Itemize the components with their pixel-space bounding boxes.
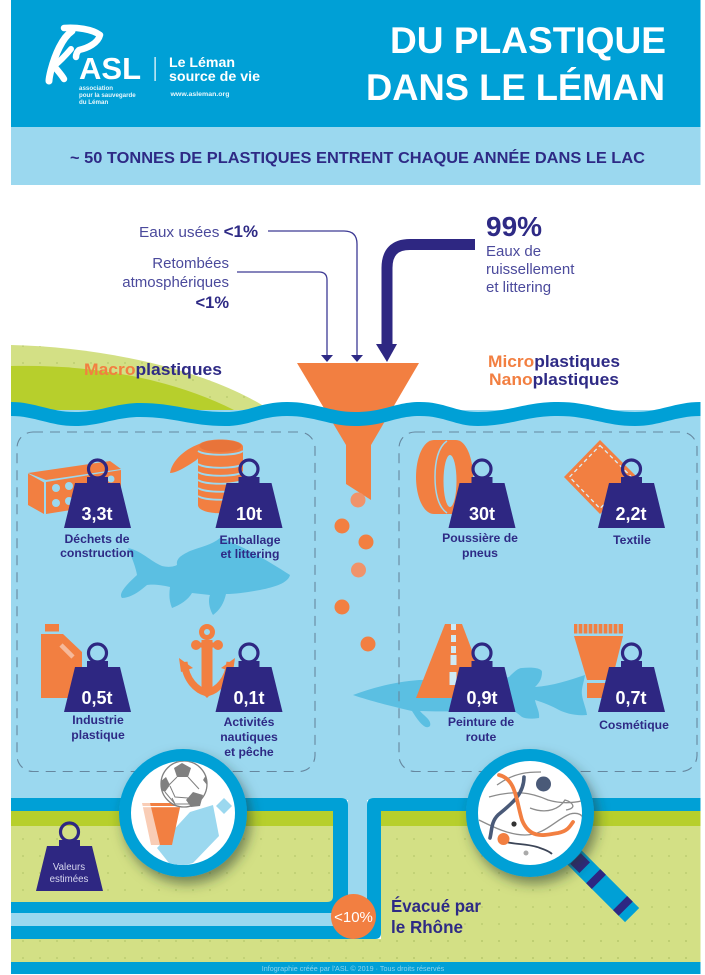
title: DU PLASTIQUE: [390, 20, 666, 61]
logo subtitle: du Léman: [79, 99, 108, 106]
label: Cosmétique: [599, 718, 669, 732]
icon: tube: [574, 624, 623, 698]
ground: left bank: [11, 798, 348, 939]
icon: can: [170, 440, 243, 513]
item: textile: [564, 440, 665, 547]
icon: bottle cap: [216, 798, 232, 814]
lake water: [11, 410, 700, 800]
icon: road: [416, 624, 490, 698]
hill: [11, 345, 262, 425]
source: eaux de ruissellement: et littering: [486, 279, 551, 296]
weight: 0,1t: 0,1t: [233, 688, 265, 708]
label: construction: [60, 546, 134, 560]
outflow badge: [331, 894, 376, 939]
weight legend: valeurs estimées: [36, 823, 103, 891]
weight: 30t: 30t: [469, 504, 495, 524]
wave surface: [11, 402, 700, 426]
subtitle band: [11, 127, 700, 185]
label: Textile: [613, 533, 651, 547]
dark fibres: [490, 777, 524, 838]
item: peinture de route: [416, 624, 516, 744]
heading: micro et nanoplastiques: Microplastiques: [488, 353, 616, 371]
fish: left: [121, 538, 290, 615]
icon: anchor: [179, 626, 235, 698]
fish: pike: [353, 668, 587, 727]
item: cosmétique: [574, 624, 669, 732]
panel: microplastiques frame: [399, 432, 697, 772]
label: nautiques: [220, 730, 278, 744]
item: activités nautiques et pêche: [179, 626, 282, 759]
funnel: [297, 363, 419, 500]
icon: fabric: [564, 440, 637, 514]
label: route: [466, 730, 496, 744]
logo ASL: [49, 28, 260, 106]
source: retombées atmosphériques: [122, 255, 333, 362]
label: Peinture de: [448, 715, 514, 729]
label: évacué par le Rhône: le Rhône: [391, 917, 463, 937]
logo slogan: source de vie: [169, 68, 260, 84]
logo website: www.asleman.org: [169, 91, 230, 98]
footer credit: Infographie créée par l'ASL © 2019 · Tous droits réservés: [262, 964, 445, 973]
footer bar: [11, 962, 700, 974]
weight: 2,2t: 2,2t: [615, 504, 647, 524]
plastic droplets: [334, 492, 376, 652]
label: pneus: [462, 546, 498, 560]
source: eaux usées: Eaux usées <1%: [139, 223, 258, 241]
item: poussière de pneus: [416, 440, 518, 560]
outflow badge: <10%: [334, 909, 373, 926]
weight: 3,3t: 3,3t: [81, 504, 113, 524]
item: industrie plastique: [41, 624, 131, 742]
icon: jug: [41, 624, 82, 698]
dolphin mark: [49, 28, 100, 81]
source: eaux de ruissellement: 99%: [486, 211, 542, 242]
magnifier: microplastics: [466, 749, 639, 922]
magnifier handle: [565, 848, 639, 922]
icon: brick: [28, 461, 121, 514]
weight: 0,9t: 0,9t: [466, 688, 498, 708]
weight legend: valeurs estimées: estimées: [50, 874, 89, 885]
title: DANS LE LÉMAN: [366, 67, 665, 108]
source: retombées atmosphériques: Retombées: [152, 255, 229, 272]
label: Poussière de: [442, 531, 518, 545]
icon: cup: [150, 803, 181, 845]
label: Activités: [224, 715, 275, 729]
header banner: [11, 0, 700, 127]
particles: [536, 776, 551, 792]
label: plastique: [71, 728, 125, 742]
icon: cup reflection: [142, 803, 161, 845]
source: eaux de ruissellement: Eaux de: [486, 243, 541, 260]
label: Emballage: [220, 533, 281, 547]
icon: tire: [416, 440, 473, 514]
magnifier: macroplastics: [119, 749, 247, 877]
weight: 10t: 10t: [236, 504, 262, 524]
label: Déchets de: [64, 532, 130, 546]
icon: bottle: [157, 805, 219, 868]
icon: football: [161, 761, 207, 807]
label: et pêche: [224, 745, 274, 759]
logo slogan: Le Léman: [169, 54, 235, 70]
logo subtitle: pour la sauvegarde: [79, 92, 136, 99]
label: et littering: [221, 547, 279, 561]
logo name: ASL: [79, 51, 141, 86]
weight: 0,5t: 0,5t: [81, 688, 113, 708]
logo subtitle: association: [79, 85, 113, 92]
subtitle: ~ 50 TONNES DE PLASTIQUES ENTRENT CHAQUE ANNÉE DANS LE LAC: [70, 150, 645, 167]
source: eaux usées: [139, 223, 363, 362]
source: eaux de ruissellement: [376, 211, 575, 362]
cup rim: [142, 806, 181, 807]
panel: macroplastiques frame: [17, 432, 315, 772]
grey fibres: [479, 772, 585, 835]
weight: 0,7t: 0,7t: [615, 688, 647, 708]
source: eaux de ruissellement: ruissellement: [486, 261, 575, 278]
item: déchets de construction: [28, 460, 134, 560]
ground: right bank: [11, 798, 700, 962]
orange fibre: [499, 775, 573, 835]
source: retombées atmosphériques: atmosphériques: [122, 274, 229, 291]
source: retombées atmosphériques: <1%: [196, 294, 229, 312]
item: emballage et littering: [170, 440, 282, 561]
label: évacué par le Rhône: Évacué par: [391, 895, 481, 916]
heading: micro et nanoplastiques: Nanoplastiques: [489, 371, 614, 389]
heading: macroplastiques: Macroplastiques: [84, 361, 222, 379]
label: Industrie: [72, 713, 124, 727]
logo divider: [154, 57, 156, 81]
weight legend: valeurs estimées: Valeurs: [53, 862, 85, 873]
